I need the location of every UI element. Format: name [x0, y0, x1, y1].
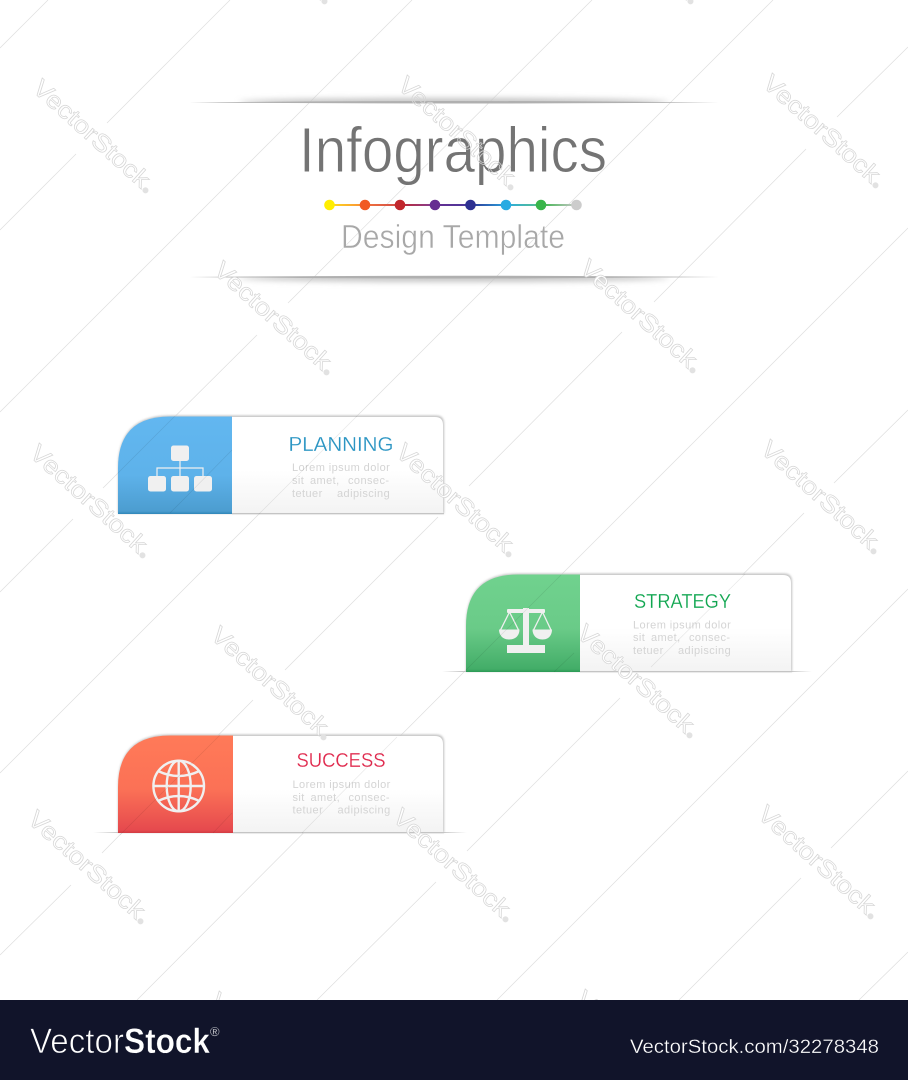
text block: success: consec-: [348, 792, 390, 804]
panel: success: [93, 734, 467, 833]
footer url: VectorStock.com/32278348: [630, 1037, 879, 1058]
icon: globe: [153, 761, 204, 811]
footer logo: Stock: [124, 1022, 210, 1061]
subtitle: Design Template: [341, 218, 565, 255]
footer logo: [30, 1022, 220, 1061]
text: VectorStock: [755, 435, 884, 555]
text: VectorStock: [574, 254, 703, 374]
title: Infographics: [299, 114, 607, 186]
heading: strategy: STRATEGY: [634, 590, 731, 613]
text block: strategy: consec-: [689, 632, 730, 644]
panel: planning: [118, 416, 444, 514]
text: VectorStock: [387, 803, 516, 923]
text: VectorStock: [27, 74, 156, 194]
text block: planning: amet,: [310, 475, 340, 487]
footer logo: Vector: [30, 1022, 124, 1061]
heading: success: SUCCESS: [296, 749, 386, 772]
text: VectorStock: [24, 439, 153, 559]
icon: org chart: [148, 446, 212, 492]
text: VectorStock: [571, 619, 700, 739]
header rule: bottom: [189, 274, 719, 282]
text block: success: adipiscing: [338, 804, 391, 816]
header rule: top: [189, 98, 719, 106]
heading: planning: PLANNING: [288, 433, 394, 456]
text block: success: Lorem ipsum dolor: [292, 779, 391, 791]
text block: planning: consec-: [348, 475, 389, 487]
text block: planning: tetuer: [292, 488, 323, 500]
text: VectorStock: [208, 256, 337, 376]
text: VectorStock: [390, 438, 519, 558]
text block: strategy: Lorem ipsum dolor: [633, 620, 731, 632]
panel: strategy: [442, 574, 812, 672]
text: VectorStock: [752, 800, 881, 920]
text block: success: amet,: [310, 792, 340, 804]
text: VectorStock: [22, 805, 151, 925]
footer logo: ®: [210, 1024, 220, 1039]
text block: strategy: amet,: [651, 632, 681, 644]
text: VectorStock: [205, 621, 334, 741]
text: VectorStock: [757, 69, 886, 189]
text: VectorStock: [392, 71, 521, 191]
footer bar: [0, 1000, 908, 1080]
text block: success: sit: [292, 792, 305, 804]
text block: planning: Lorem ipsum dolor: [292, 462, 390, 474]
text block: planning: adipiscing: [337, 488, 390, 500]
icon: balance scale: [499, 608, 552, 653]
text block: strategy: tetuer: [633, 645, 664, 657]
colored dot timeline: [324, 200, 582, 210]
text block: strategy: sit: [633, 632, 645, 644]
text block: success: tetuer: [292, 804, 323, 816]
text block: planning: sit: [292, 475, 304, 487]
text block: strategy: adipiscing: [678, 645, 731, 657]
